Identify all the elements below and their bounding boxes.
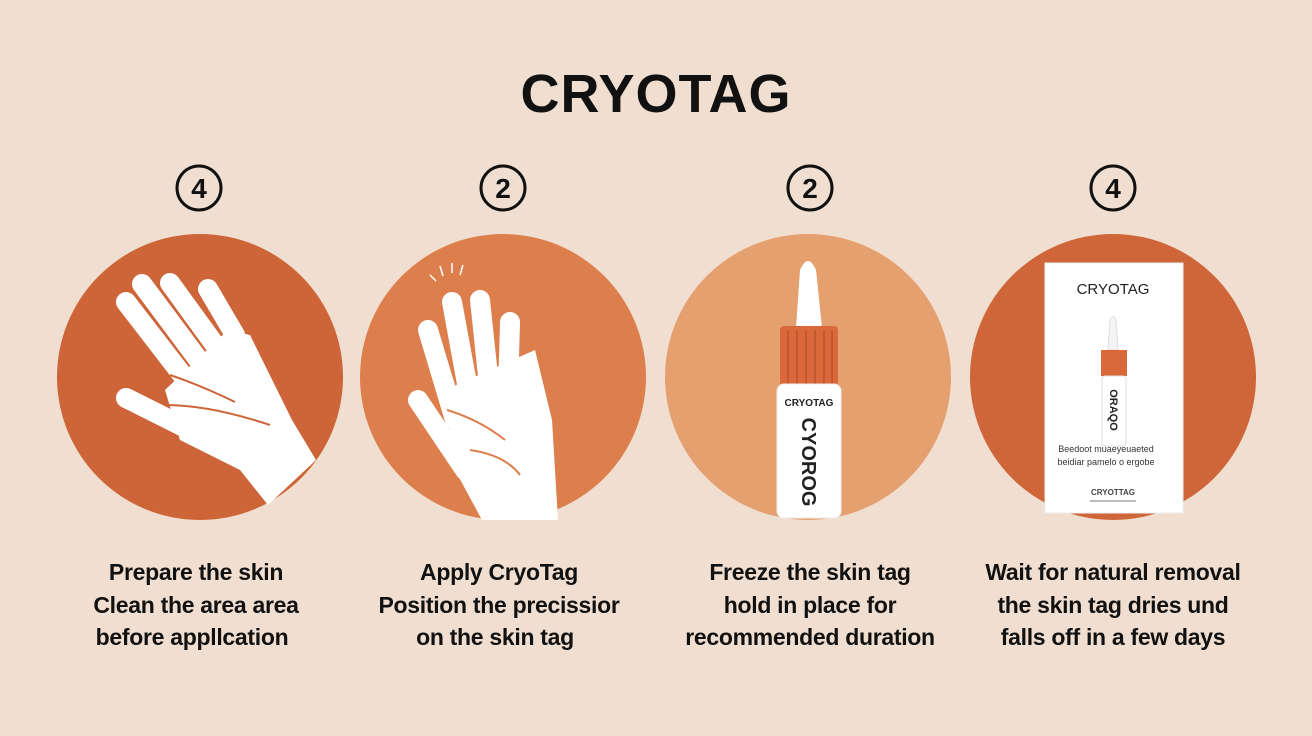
step texts: Prepare the skin — [109, 559, 283, 585]
panel 4: package — [970, 234, 1256, 520]
panel 4: package: ORAQO — [1107, 389, 1119, 431]
panel 3: bottle — [665, 234, 951, 520]
panel 3: bottle: CYOROG — [797, 418, 819, 506]
panel 1: hand — [57, 234, 343, 520]
panel 4: package: CRYOTAG — [1077, 281, 1149, 298]
text: 2 — [495, 173, 511, 204]
step texts: before appllcation — [96, 624, 288, 650]
step texts: Clean the area area — [93, 592, 299, 618]
step texts: Freeze the skin tag — [709, 559, 911, 585]
step numbers — [177, 166, 1135, 210]
text: 4 — [1105, 173, 1121, 204]
text: 4 — [191, 173, 207, 204]
panel 4: package: CRYOTTAG — [1091, 488, 1135, 497]
step texts: Position the precissior — [378, 592, 620, 618]
panel 4: package: Beedoot muaeyeuaeted — [1058, 444, 1154, 454]
step texts: Wait for natural removal — [985, 559, 1241, 585]
step texts: the skin tag dries und — [997, 592, 1229, 618]
step texts: Apply CryoTag — [420, 559, 578, 585]
step texts: hold in place for — [724, 592, 897, 618]
step texts: recommended duration — [685, 624, 935, 650]
panel 4: package: beidiar pamelo o ergobe — [1057, 457, 1155, 467]
panel 3: bottle: CRYOTAG — [785, 398, 834, 409]
text: 2 — [802, 173, 818, 204]
step texts: on the skin tag — [416, 624, 574, 650]
step texts: falls off in a few days — [1001, 624, 1225, 650]
panel 2: hand — [360, 234, 646, 520]
title: CRYOTAG — [520, 64, 792, 124]
step texts — [93, 559, 1241, 650]
